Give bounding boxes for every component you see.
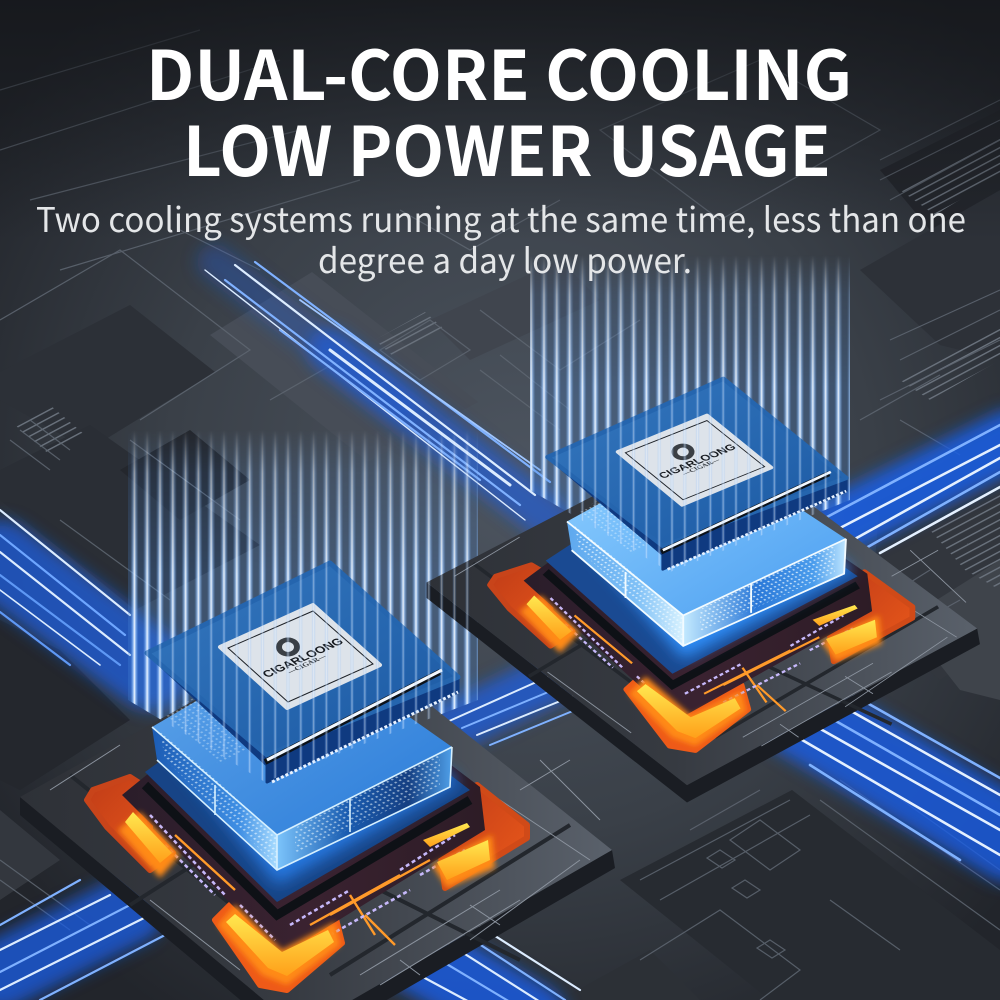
title: LOW POWER USAGE [183, 97, 831, 196]
right cooling beams behind chip [530, 259, 850, 512]
chip label: CIGARLOONG [656, 443, 739, 481]
heat bars [520, 595, 882, 746]
blue underglow [579, 468, 853, 659]
chip label [618, 415, 771, 505]
glass cooling block [567, 446, 846, 646]
streak lines upper right [827, 425, 1000, 553]
blue light streaks [0, 262, 1000, 1000]
glass cooling block [152, 640, 452, 870]
chip label: CIGARLOONG [259, 636, 346, 680]
chip label: —CIGAR— [284, 653, 329, 676]
base plate [427, 433, 980, 802]
circuit layers [122, 650, 485, 955]
top shading [0, 0, 1000, 240]
subtitle: Two cooling systems running at the same time, less than one [36, 193, 966, 242]
left cooling beams over chip [128, 430, 478, 790]
chip label: —CIGAR— [680, 457, 722, 477]
left cooling beams behind chip [128, 434, 478, 720]
chip body [548, 379, 846, 569]
streak lines left [0, 510, 130, 665]
streak glow [0, 262, 1000, 1000]
circuit layers [524, 454, 872, 720]
title: DUAL-CORE COOLING [146, 21, 852, 120]
orange heat frame [87, 777, 527, 990]
base plate [20, 625, 615, 1000]
right processor assembly [427, 379, 980, 802]
right cooling beams over chip [530, 255, 850, 585]
chip body [147, 563, 458, 782]
orange heat frame [490, 565, 912, 750]
heat bars [118, 812, 495, 985]
streak lines bottom center [395, 920, 580, 1000]
subtitle [36, 193, 966, 283]
title [146, 21, 852, 196]
subtitle: degree a day low power. [318, 234, 692, 283]
streak lines middle [447, 675, 580, 745]
blue underglow [165, 665, 460, 885]
streak lines lower right [797, 695, 1000, 860]
chip label [220, 605, 380, 708]
streak lines bottom left [0, 880, 165, 1000]
streak lines upper left [205, 262, 550, 520]
left processor assembly [20, 563, 615, 1000]
